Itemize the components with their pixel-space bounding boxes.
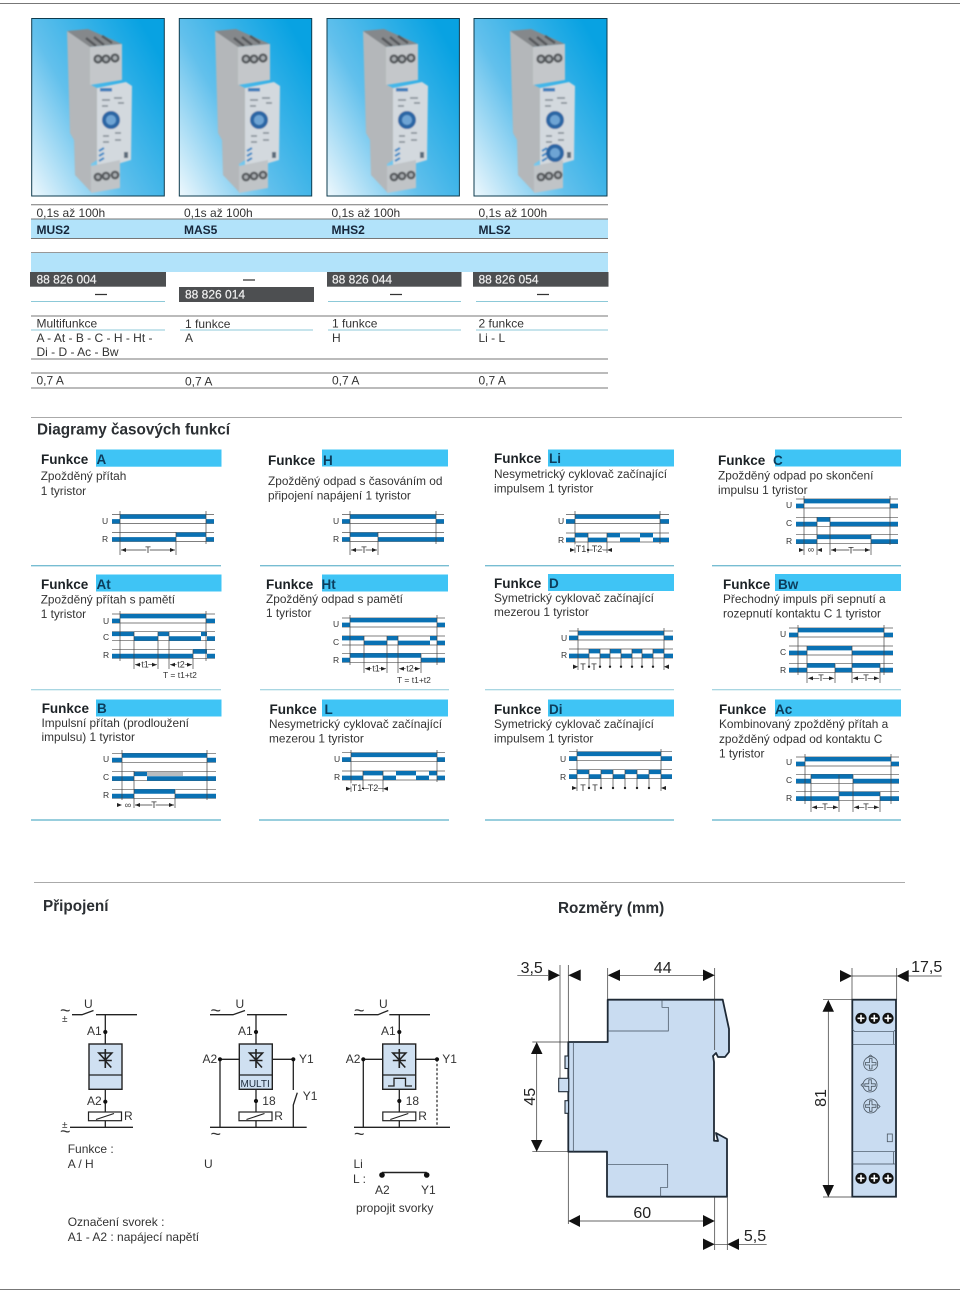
timing chart B: ∞ [125, 800, 131, 810]
note: terminal designation: Označení svorek : [68, 1215, 164, 1229]
panel: Funkce L: mezerou 1 tyristor [269, 732, 364, 746]
timing chart D: R [561, 650, 567, 660]
wiring diagram: Li / L: Y1 [442, 1052, 457, 1066]
panel: Funkce D: Symetrický cyklovač začínající [494, 591, 655, 605]
dimension: 45 [522, 1042, 542, 1152]
timing chart Ac: C [786, 775, 792, 785]
wiring diagram: A / H: A1 [87, 1024, 102, 1038]
panel: Funkce H [268, 450, 448, 555]
wiring diagram: U: U [236, 997, 244, 1011]
wiring diagram: U: MULTI [240, 1079, 270, 1090]
panel: Funkce H: Funkce [268, 453, 316, 468]
timing chart B: U [103, 754, 109, 764]
panel: Funkce A [41, 450, 222, 555]
wiring diagram: A / H: U [84, 997, 93, 1011]
table row: current: 0,7 A [36, 374, 64, 388]
note: Li / L jumper: Y1 [421, 1183, 436, 1197]
timing chart C: U [786, 500, 792, 510]
panel: Funkce At [41, 574, 222, 680]
timing chart H [333, 511, 444, 555]
panel: Funkce Bw: Bw [778, 577, 799, 592]
wiring diagram: A / H: ± [62, 1014, 68, 1025]
panel: Funkce Bw [723, 574, 901, 683]
panel: Funkce Ht: Funkce [266, 577, 314, 592]
panel: Funkce B: Funkce [42, 701, 89, 716]
timing chart At [103, 611, 215, 680]
photo: MHS2 [327, 18, 459, 196]
panel: Funkce D [494, 574, 674, 672]
timing chart Di: U [560, 754, 566, 764]
panel: Funkce Ac: Ac [775, 702, 793, 717]
wiring diagram: Li / L: ~ [354, 1001, 365, 1021]
panel: Funkce Li [494, 450, 674, 554]
table rows: functions [31, 316, 608, 359]
product table [30, 205, 608, 388]
timing chart H: R [333, 534, 339, 544]
table row: model names: MUS2 [36, 223, 70, 237]
dimension: 44: 44 [654, 960, 672, 977]
note: terminal designation: A1 - A2 : napájecí napětí [68, 1230, 200, 1244]
panel: Funkce H: H [323, 453, 333, 468]
panel: Funkce At: 1 tyristor [41, 607, 86, 621]
dimension: 17,5: 17,5 [911, 959, 942, 976]
timing chart At: t1 [141, 660, 149, 670]
timing chart D: T [591, 662, 597, 672]
panel: Funkce D: D [549, 576, 559, 591]
wiring diagram: Li / L: U [379, 997, 388, 1011]
table rows: functions: 2 funkce [478, 316, 524, 330]
timing chart A: R [102, 534, 108, 544]
panel: Funkce Ac [719, 700, 901, 812]
timing chart C: T [848, 546, 854, 556]
table rows: functions: A - At - B - C - H - Ht - [36, 331, 153, 345]
panel: Funkce B: B [97, 701, 107, 716]
dimension: 17,5 [840, 959, 942, 982]
table row: time range: 0,1s až 100h [332, 206, 400, 220]
dimension: 45: 45 [522, 1088, 539, 1106]
panel: Funkce Ht: Ht [322, 577, 336, 592]
top rule [0, 2, 960, 4]
panel: Funkce Ac: Kombinovaný zpožděný přítah a [719, 717, 889, 731]
timing chart A [102, 511, 214, 555]
photo: MLS2 [474, 18, 607, 196]
panel: Funkce B: impulsu) 1 tyristor [42, 730, 135, 744]
wiring diagram: Li / L: R [418, 1109, 427, 1123]
timing chart H: T [361, 545, 367, 555]
wiring diagram: A / H: ~ [60, 1001, 71, 1021]
dimension: 5,5: 5,5 [744, 1228, 766, 1245]
table rows: functions: 1 funkce [332, 316, 378, 330]
panel: Funkce L: Funkce [270, 702, 317, 717]
wiring diagram: U: ~ [210, 1124, 221, 1144]
timing chart Li [558, 511, 669, 554]
timing chart L: U [334, 754, 340, 764]
note: Li / L jumper: Li [354, 1157, 363, 1171]
table rows: order codes: 88 826 054 [478, 272, 539, 286]
panel: Funkce Ht: 1 tyristor [266, 606, 311, 620]
panel: Funkce Li: Funkce [494, 451, 542, 466]
table rows: functions: Multifunkce [36, 316, 98, 330]
note: terminal designation [68, 1215, 200, 1244]
timing chart Li: U [558, 516, 564, 526]
table rows: functions: Li - L [478, 331, 506, 345]
timing chart Ht: R [333, 655, 339, 665]
table row: model names: MAS5 [184, 223, 218, 237]
timing chart D: T [580, 662, 586, 672]
timing chart Ht: t2 [406, 664, 414, 674]
timing chart Di: T [592, 783, 598, 793]
timing chart B: C [103, 772, 109, 782]
wiring diagram: Li / L: A2 [346, 1052, 361, 1066]
timing chart Ht: C [333, 637, 339, 647]
timing chart L: R [334, 772, 340, 782]
wiring diagram: U: Y1 [299, 1052, 314, 1066]
timing chart Ac: T [822, 802, 828, 812]
timing chart Bw: R [780, 665, 786, 675]
product photos [32, 18, 607, 196]
panel: Funkce A: Funkce [41, 452, 89, 467]
dimension: 81: 81 [813, 1089, 830, 1107]
panel: Funkce Di: impulsem 1 tyristor [494, 732, 593, 746]
panel: Funkce C: Funkce [718, 453, 766, 468]
panel: Funkce A: Zpožděný přítah [41, 469, 126, 483]
panel: Funkce H: Zpožděný odpad s časováním od [268, 474, 442, 488]
timing chart A: T [145, 545, 151, 555]
panel: Funkce C: Zpožděný odpad po skončení [718, 468, 874, 482]
timing chart Li: T1 [576, 544, 586, 554]
timing chart B [103, 750, 216, 810]
panel: Funkce L: Nesymetrický cyklovač začínající [269, 717, 443, 731]
note: functions A / H: Funkce : [68, 1142, 114, 1156]
timing chart Di [560, 749, 672, 793]
timing chart Bw: T [818, 673, 824, 683]
dimension: 60: 60 [633, 1205, 651, 1222]
wiring diagram: U: Y1 [303, 1089, 318, 1103]
wiring diagram: A / H: ± [62, 1120, 68, 1131]
wiring diagram: A / H [60, 997, 137, 1142]
timing chart C: R [786, 536, 792, 546]
wiring diagram: U: ~ [210, 1001, 221, 1021]
table rows: functions: 1 funkce [185, 317, 231, 331]
timing chart Di: T [580, 783, 586, 793]
panel: Funkce Di [494, 700, 674, 793]
wiring diagram: Li / L: A1 [381, 1024, 396, 1038]
timing chart Ac [786, 754, 899, 812]
timing chart Bw [780, 625, 893, 683]
timing chart Li: R [558, 535, 564, 545]
table row: current [36, 374, 506, 388]
dimension: 60 [568, 1205, 715, 1227]
heading: diagrams: Diagramy časových funkcí [37, 422, 231, 438]
timing chart B: R [103, 790, 109, 800]
panel: Funkce Bw: Přechodný impuls při sepnutí a [723, 592, 886, 606]
panel: Funkce A: 1 tyristor [41, 484, 86, 498]
panel: Funkce At: Zpožděný přítah s pamětí [41, 592, 176, 606]
dimension drawing: side view [517, 960, 767, 1250]
wiring diagram: U: A2 [202, 1052, 218, 1066]
panel: Funkce B: Impulsní přítah (prodloužení [42, 716, 190, 730]
dimension: 5,5 [703, 1228, 766, 1250]
panel: Funkce Bw: rozepnutí kontaktu C 1 tyristor [723, 606, 881, 620]
timing chart C: C [786, 518, 792, 528]
timing chart L: T1 [352, 783, 362, 793]
note: U: U [204, 1157, 213, 1171]
note: functions A / H [68, 1142, 114, 1171]
timing chart Ht: t1 [372, 664, 380, 674]
panel: Funkce H: připojení napájení 1 tyristor [268, 488, 411, 502]
dimension drawing: front view [813, 959, 942, 1197]
panel: Funkce At: At [96, 577, 111, 592]
table row: time range: 0,1s až 100h [478, 206, 547, 220]
timing chart Ac: U [786, 757, 792, 767]
screw terminals [855, 1013, 894, 1184]
heading: connection: Připojení [43, 898, 109, 915]
timing chart At: C [103, 632, 109, 642]
wiring diagram: U: R [274, 1109, 283, 1123]
heading: dimensions: Rozměry (mm) [558, 900, 664, 917]
timing chart Ht [333, 615, 445, 685]
table row: current: 0,7 A [185, 374, 212, 388]
timing chart Di: R [560, 772, 566, 782]
note: functions A / H: A / H [68, 1157, 94, 1171]
wiring diagram: A / H: R [124, 1109, 133, 1123]
table row: time range [36, 206, 547, 220]
table rows: functions: A [185, 331, 193, 345]
timing chart D: U [561, 633, 567, 643]
photo: MAS5 [179, 18, 312, 196]
panel: Funkce L [269, 700, 448, 793]
table rows: order codes [30, 272, 608, 302]
timing chart C [786, 496, 898, 556]
panel: Funkce At: Funkce [41, 577, 89, 592]
timing chart L: T2 [368, 783, 378, 793]
table row: model names: MHS2 [332, 223, 365, 237]
timing chart At: U [103, 616, 109, 626]
timing chart Bw: T [863, 673, 869, 683]
dimension: 81 [813, 1000, 834, 1197]
panel: Funkce B [42, 700, 222, 810]
table row: current: 0,7 A [478, 374, 506, 388]
wiring diagram: U: A1 [238, 1024, 253, 1038]
table row: model names [31, 220, 608, 238]
dimension: 44 [608, 960, 715, 981]
table row: blue band [31, 253, 608, 272]
timing chart At: R [103, 650, 109, 660]
bottom rule [0, 1288, 960, 1290]
table rows: functions: Di - D - Ac - Bw [36, 345, 119, 359]
timing chart Ac: R [786, 793, 792, 803]
panel: Funkce A: A [96, 452, 106, 467]
panel: Funkce Di: Symetrický cyklovač začínající [494, 717, 655, 731]
timing chart Bw: C [780, 647, 786, 657]
panel: Funkce C: impulsu 1 tyristor [718, 483, 808, 497]
table rows: order codes: 88 826 004 [36, 272, 97, 286]
timing chart Ht: U [333, 619, 339, 629]
note: Li / L jumper: propojit svorky [356, 1201, 433, 1215]
panel: Funkce L: L [324, 702, 333, 717]
panel: Funkce Bw: Funkce [723, 577, 771, 592]
dimension: 3,5: 3,5 [521, 960, 543, 977]
timing chart At: t2 [177, 660, 185, 670]
timing chart Ht: T = t1+t2 [397, 675, 431, 685]
panel: Funkce Li: Nesymetrický cyklovač začínající [494, 467, 668, 481]
panel: Funkce Ac: zpožděný odpad od kontaktu C [719, 732, 883, 746]
panel: Funkce D: Funkce [494, 576, 542, 591]
panel: Funkce Ac: Funkce [719, 702, 767, 717]
timing chart A: U [102, 516, 108, 526]
wiring diagram: A / H: ~ [60, 1122, 71, 1142]
table row: time range: 0,1s až 100h [184, 206, 253, 220]
panel: Funkce C: C [773, 453, 783, 468]
wiring diagram: Li / L: 18 [406, 1094, 419, 1108]
timing chart Ac: T [863, 802, 869, 812]
photo: MUS2 [32, 18, 164, 196]
wiring diagram: Li / L: ~ [354, 1124, 365, 1144]
note: Li / L jumper [353, 1157, 436, 1215]
timing chart B: T [151, 800, 157, 810]
timing chart At: T = t1+t2 [163, 670, 197, 680]
timing chart Bw: U [780, 629, 786, 639]
panel: Funkce Li: Li [549, 451, 561, 466]
dimension: 3,5 [521, 960, 581, 981]
table row: model names: MLS2 [478, 223, 511, 237]
panel: Funkce D: mezerou 1 tyristor [494, 605, 589, 619]
setting dials [861, 1055, 892, 1142]
wiring diagram: U [202, 997, 318, 1144]
panel: Funkce Li: impulsem 1 tyristor [494, 482, 593, 496]
table rows: order codes: 88 826 044 [332, 272, 392, 286]
wiring diagram: U: 18 [262, 1094, 276, 1108]
panel: Funkce C [718, 450, 901, 556]
wiring diagram: A / H: A2 [87, 1094, 102, 1108]
timing chart D [561, 628, 673, 672]
panel: Funkce Ht: Zpožděný odpad s pamětí [266, 592, 404, 606]
table row: current: 0,7 A [332, 374, 359, 388]
table row: time range: 0,1s až 100h [36, 206, 105, 220]
table rows: functions: H [332, 331, 341, 345]
panel: Funkce Ht [266, 574, 448, 685]
note: Li / L jumper: L : [353, 1172, 366, 1186]
panel: Funkce Ac: 1 tyristor [719, 746, 764, 760]
timing chart H: U [333, 516, 339, 526]
wiring diagram: Li / L [346, 997, 457, 1144]
timing chart L [334, 750, 445, 793]
note: Li / L jumper: A2 [375, 1183, 390, 1197]
timing chart C: ∞ [808, 544, 814, 554]
timing chart Li: T2 [592, 544, 602, 554]
table rows: order codes: 88 826 014 [185, 288, 245, 302]
panel: Funkce Di: Di [549, 702, 562, 717]
panel: Funkce Di: Funkce [494, 702, 542, 717]
